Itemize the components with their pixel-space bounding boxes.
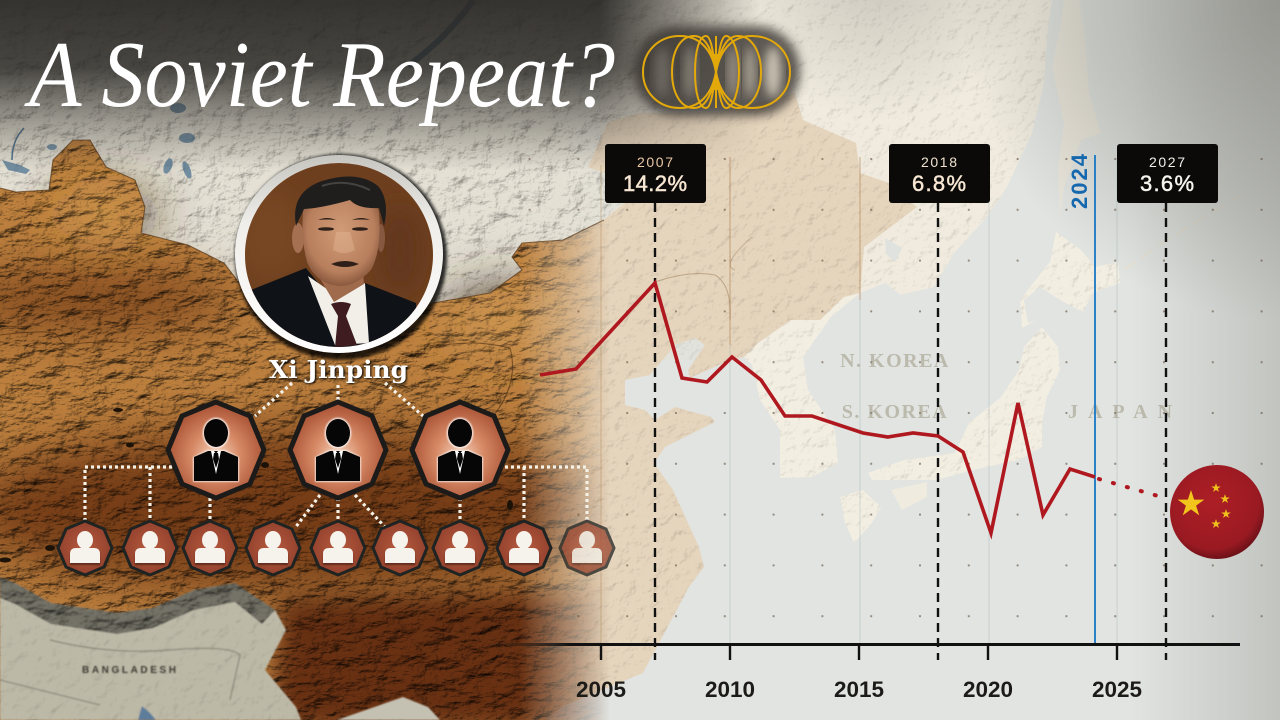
Korea [744,293,860,478]
growth line [540,283,1095,533]
country labels: JAPAN [1068,401,1182,423]
icon: junior official [183,521,237,575]
Honshu [868,327,1060,480]
callout: 2018: 6.8% [912,171,966,196]
Himalaya band [0,577,275,634]
callout: 2007: 2007 [637,154,673,170]
name label: Xi Jinping: Xi Jinping [269,355,408,384]
country labels: S. KOREA [842,401,948,423]
right and corner vignette [720,0,1280,720]
country labels: N. KOREA [840,350,950,372]
2007 dashed marker [654,203,656,660]
callout: 2007: 14.2% [623,171,687,196]
icon: junior official [58,521,112,575]
Indian subcontinent terrain [0,577,440,720]
2018 dashed marker [937,203,939,660]
Sakhalin island [1052,0,1101,217]
x axis: 2010 [705,677,755,702]
callout: 2018: 2018 [921,154,957,170]
black lake spots [0,408,513,562]
hair [295,177,386,226]
2027 dashed marker [1165,203,1167,660]
map border lines [0,140,752,440]
icon: junior official [560,521,614,575]
ears [292,223,304,253]
left-side brown terrain [0,140,606,720]
plateau highlights [55,190,580,350]
icon: junior official [433,521,487,575]
tie [331,302,357,347]
Shikoku [891,482,927,510]
callout: 2007 [605,144,706,203]
ridge and basin shading [0,272,640,590]
Kuril islands [1124,193,1244,270]
logo shadow [634,26,800,116]
x axis: 2025 [1092,677,1142,702]
icon: junior official [123,521,177,575]
chart background grid [500,150,1280,645]
icon: senior official [412,402,508,498]
country labels [840,350,1182,423]
portrait shadow [235,154,447,360]
logo: gold rings [634,26,800,116]
Mongolia and Siberia terrain [0,0,780,360]
Kyushu [840,490,881,543]
Amur bay lake [885,238,902,262]
icon: junior official [373,521,427,575]
shirt [308,276,369,345]
icon: junior official [497,521,551,575]
callout: 2018 [889,144,990,203]
China beige land [0,93,917,720]
icon: senior official [290,402,386,498]
junior officials row [58,521,614,575]
icon: China flag ball [1170,465,1264,559]
callout: 2027: 3.6% [1140,171,1194,196]
eyes brows and mouth [318,218,370,267]
suit [252,268,416,347]
dark title overlay [0,0,780,170]
portrait ring [235,155,443,353]
callout: 2027: 2027 [1149,154,1185,170]
callout: 2027 [1117,144,1218,203]
neck [320,277,364,302]
portrait: Xi Jinping [235,154,447,360]
lakes [2,0,473,180]
icon: senior official [168,402,264,498]
chart: growth over time [485,144,1264,702]
2024 label: 2024 [1067,153,1092,209]
title: A Soviet Repeat? [24,23,615,127]
portrait photo [245,163,433,347]
icon: junior official [246,521,300,575]
face [302,192,380,286]
x axis [485,643,1240,702]
senior officials row [168,402,508,498]
icon: junior official [311,521,365,575]
Russian far east land [600,0,1052,295]
x axis: 2015 [834,677,884,702]
org chart connectors [85,383,587,528]
Hokkaido [1020,232,1120,328]
forecast dotted line [1099,479,1158,496]
x axis: 2020 [963,677,1013,702]
map label: Bangladesh: BANGLADESH [82,665,176,676]
x axis: 2005 [576,677,626,702]
2024 blue line [1094,155,1096,645]
